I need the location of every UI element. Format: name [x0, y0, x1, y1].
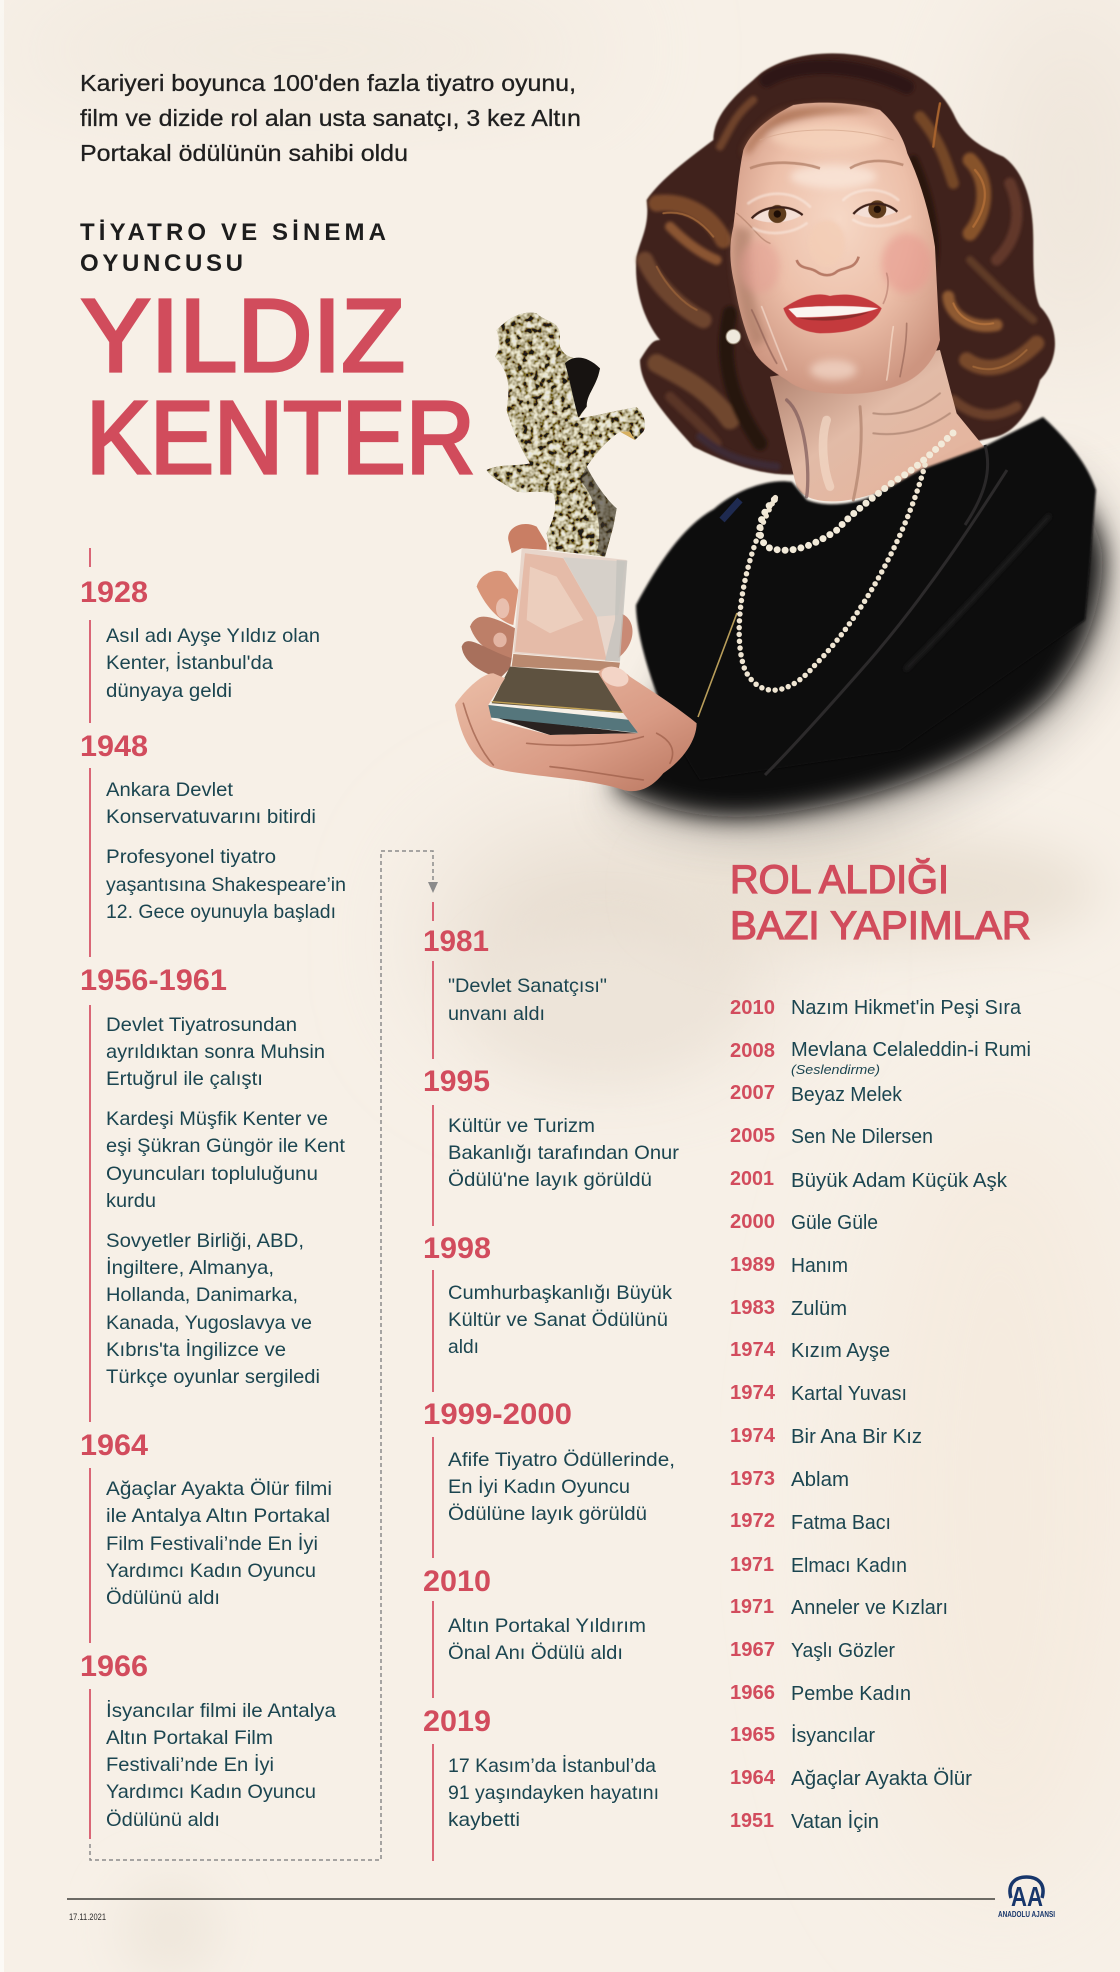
- right eye: [853, 200, 897, 218]
- entry 1995: Bakanlığı tarafından Onur: [448, 1142, 680, 1164]
- entry 1999-2000: Ödülüne layık görüldü: [448, 1503, 647, 1525]
- logo: Anadolu Ajansı: ANADOLU AJANSI: [998, 1909, 1055, 1919]
- mouth: [783, 294, 882, 333]
- dashed connector arrow: [90, 851, 438, 1860]
- productions list: 2000: [730, 1211, 775, 1233]
- entry 1948: Ankara Devlet: [106, 779, 234, 801]
- entry 1928: 1928: [80, 576, 148, 609]
- entry 1964: ile Antalya Altın Portakal: [106, 1505, 330, 1527]
- entry 1956-1961: Türkçe oyunlar sergiledi: [106, 1366, 320, 1388]
- entry 1966: Ödülünü aldı: [106, 1809, 220, 1831]
- earring: [726, 329, 741, 344]
- productions list: 1974: [730, 1382, 776, 1404]
- entry 1956-1961: Sovyetler Birliği, ABD,: [106, 1230, 304, 1252]
- productions list: Kızım Ayşe: [791, 1340, 890, 1362]
- entry 1928: Asıl adı Ayşe Yıldız olan: [106, 625, 320, 647]
- entry 1966: Yardımcı Kadın Oyuncu: [106, 1781, 316, 1803]
- heading: productions: [730, 857, 1031, 948]
- entry 2019: 17 Kasım’da İstanbul’da: [448, 1754, 656, 1777]
- timeline: left column: [80, 548, 346, 1839]
- entry 1948: 12. Gece oyunuyla başladı: [106, 901, 336, 923]
- productions list: Ağaçlar Ayakta Ölür: [791, 1768, 972, 1790]
- soft lower edge of black clothing: [614, 470, 1111, 832]
- wrinkles: [737, 130, 907, 380]
- entry 1998: aldı: [448, 1336, 479, 1358]
- productions list: Bir Ana Bir Kız: [791, 1426, 922, 1448]
- entry 2019: 91 yaşındayken hayatını: [448, 1782, 659, 1804]
- entry 1999-2000: Afife Tiyatro Ödüllerinde,: [448, 1449, 675, 1471]
- entry 1966: [80, 1650, 336, 1839]
- productions list: (Seslendirme): [791, 1063, 880, 1077]
- productions list: 1971: [730, 1596, 774, 1618]
- entry 1948: 1948: [80, 730, 148, 763]
- gold chain: [698, 613, 737, 717]
- productions list: Sen Ne Dilersen: [791, 1126, 933, 1148]
- productions list: 1974: [730, 1339, 776, 1361]
- productions list: 2001: [730, 1168, 774, 1190]
- productions list: Pembe Kadın: [791, 1683, 911, 1705]
- productions list: Yaşlı Gözler: [791, 1640, 895, 1662]
- productions list: Fatma Bacı: [791, 1512, 891, 1534]
- jacket folds: [722, 445, 1050, 775]
- entry 1956-1961: Ertuğrul ile çalıştı: [106, 1068, 263, 1090]
- entry 1956-1961: [80, 964, 346, 1422]
- black jacket and dress: [636, 417, 1096, 780]
- entry 1956-1961: Kanada, Yugoslavya ve: [106, 1312, 312, 1334]
- subtitle: [80, 219, 386, 277]
- intro text: Portakal ödülünün sahibi oldu: [80, 140, 408, 166]
- entry 1928: Kenter, İstanbul'da: [106, 651, 273, 674]
- trophy hands back: [462, 524, 632, 678]
- productions list: 1974: [730, 1425, 776, 1447]
- entry 1995: 1995: [423, 1065, 490, 1098]
- entry 1966: Festivali’nde En İyi: [106, 1753, 274, 1776]
- intro text: Kariyeri boyunca 100'den fazla tiyatro oyunu,: [80, 70, 576, 96]
- entry 1956-1961: eşi Şükran Güngör ile Kent: [106, 1135, 346, 1157]
- entry 1981: 1981: [423, 925, 489, 958]
- productions list: 1951: [730, 1810, 774, 1832]
- entry 2019: kaybetti: [448, 1809, 520, 1831]
- heading: productions: ROL ALDIĞI: [730, 857, 949, 902]
- productions list: 1983: [730, 1297, 775, 1319]
- entry 1956-1961: Oyuncuları topluluğunu: [106, 1163, 318, 1185]
- entry 1966: İsyancılar filmi ile Antalya: [106, 1699, 336, 1722]
- entry 1998: Cumhurbaşkanlığı Büyük: [448, 1282, 672, 1304]
- entry 1998: 1998: [423, 1232, 491, 1265]
- entry 1999-2000: En İyi Kadın Oyuncu: [448, 1475, 630, 1498]
- entry 1956-1961: İngiltere, Almanya,: [106, 1256, 274, 1279]
- timeline: middle column: [423, 902, 680, 1861]
- entry 1964: Yardımcı Kadın Oyuncu: [106, 1560, 316, 1582]
- productions list: Ablam: [791, 1469, 849, 1491]
- productions list: 1964: [730, 1767, 776, 1789]
- entry 1999-2000: 1999-2000: [423, 1398, 572, 1431]
- hair: [636, 53, 1055, 475]
- productions list: Elmacı Kadın: [791, 1555, 907, 1577]
- logo: Anadolu Ajansı: [998, 1877, 1055, 1919]
- entry 2010: 2010: [423, 1565, 491, 1598]
- entry 1964: Ödülünü aldı: [106, 1587, 220, 1609]
- entry 1928: dünyaya geldi: [106, 680, 232, 702]
- entry 1995: Kültür ve Turizm: [448, 1115, 595, 1137]
- productions list: Kartal Yuvası: [791, 1383, 907, 1405]
- entry 2010: Altın Portakal Yıldırım: [448, 1615, 646, 1637]
- entry 1956-1961: Hollanda, Danimarka,: [106, 1284, 298, 1306]
- entry 1948: Profesyonel tiyatro: [106, 846, 276, 868]
- entry 1999-2000: [423, 1398, 675, 1558]
- productions list: 2007: [730, 1082, 775, 1104]
- entry 1956-1961: Kıbrıs'ta İngilizce ve: [106, 1338, 286, 1361]
- entry 1995: [423, 1065, 680, 1226]
- trophy crystal block: [512, 548, 627, 672]
- subtitle: OYUNCUSU: [80, 250, 243, 277]
- entry 1964: [80, 1429, 332, 1643]
- logo: Anadolu Ajansı: AA: [1011, 1881, 1043, 1912]
- title: YILDIZ: [81, 278, 405, 393]
- entry 1964: Film Festivali’nde En İyi: [106, 1532, 318, 1555]
- productions list: 2008: [730, 1040, 775, 1062]
- date: 17.11.2021: [69, 1912, 106, 1923]
- heading: productions: BAZI YAPIMLAR: [730, 904, 1031, 948]
- pearl necklaces: [739, 433, 953, 690]
- productions list: Güle Güle: [791, 1212, 878, 1234]
- entry 1981: "Devlet Sanatçısı": [448, 975, 607, 997]
- productions list: 1965: [730, 1724, 775, 1746]
- entry 1956-1961: kurdu: [106, 1190, 156, 1212]
- entry 1948: [80, 730, 346, 957]
- left eye: [752, 205, 803, 223]
- intro text: film ve dizide rol alan usta sanatçı, 3 kez Altın: [80, 105, 581, 131]
- entry 1966: Altın Portakal Film: [106, 1727, 273, 1749]
- entry 1948: yaşantısına Shakespeare’in: [106, 874, 346, 896]
- productions list: Vatan İçin: [791, 1810, 879, 1833]
- trophy plaque and base: [488, 667, 637, 735]
- entry 2019: 2019: [423, 1705, 491, 1738]
- photo: Yıldız Kenter holding trophy: [455, 53, 1111, 832]
- title: [81, 278, 475, 495]
- productions list: 1973: [730, 1468, 775, 1490]
- intro text: [80, 70, 581, 166]
- entry 1981: unvanı aldı: [448, 1003, 545, 1025]
- productions list: Anneler ve Kızları: [791, 1597, 948, 1619]
- entry 1928: [80, 548, 320, 723]
- entry 1981: [423, 902, 607, 1059]
- face: [726, 103, 940, 394]
- productions list: Hanım: [791, 1255, 848, 1277]
- productions list: 2005: [730, 1125, 775, 1147]
- entry 1998: [423, 1232, 672, 1392]
- productions list: 2010: [730, 997, 775, 1019]
- nose: [797, 220, 859, 275]
- trophy eagle: [487, 313, 645, 557]
- entry 1964: 1964: [80, 1429, 148, 1462]
- footer rule: [67, 1898, 995, 1900]
- entry 1956-1961: 1956-1961: [80, 964, 227, 997]
- productions list: 1972: [730, 1510, 775, 1532]
- productions list: İsyancılar: [791, 1724, 875, 1747]
- productions list: 1966: [730, 1682, 775, 1704]
- productions list: Mevlana Celaleddin-i Rumi: [791, 1039, 1031, 1061]
- productions list: 1967: [730, 1639, 775, 1661]
- productions list: Büyük Adam Küçük Aşk: [791, 1170, 1008, 1192]
- entry 1956-1961: Devlet Tiyatrosundan: [106, 1014, 297, 1036]
- subtitle: TİYATRO VE SİNEMA: [80, 219, 386, 246]
- productions list: Zulüm: [791, 1298, 847, 1320]
- productions list: Nazım Hikmet'in Peşi Sıra: [791, 997, 1022, 1019]
- productions list: 1971: [730, 1554, 774, 1576]
- entry 1998: Kültür ve Sanat Ödülünü: [448, 1309, 668, 1331]
- entry 2010: [423, 1565, 646, 1698]
- title: KENTER: [86, 380, 475, 495]
- entry 1964: Ağaçlar Ayakta Ölür filmi: [106, 1478, 332, 1500]
- entry 2010: Önal Anı Ödülü aldı: [448, 1642, 623, 1664]
- neck: [770, 350, 987, 501]
- productions list: [730, 997, 1031, 1833]
- entry 1956-1961: ayrıldıktan sonra Muhsin: [106, 1041, 325, 1063]
- eyebrows: [750, 161, 903, 168]
- entry 1966: 1966: [80, 1650, 148, 1683]
- entry 2019: [423, 1705, 659, 1861]
- eye highlights: [748, 190, 910, 233]
- entry 1948: Konservatuvarını bitirdi: [106, 806, 316, 828]
- productions list: 1989: [730, 1254, 775, 1276]
- entry 1956-1961: Kardeşi Müşfik Kenter ve: [106, 1108, 328, 1130]
- productions list: Beyaz Melek: [791, 1084, 903, 1106]
- entry 1995: Ödülü'ne layık görüldü: [448, 1169, 652, 1191]
- trophy front hand: [455, 663, 697, 791]
